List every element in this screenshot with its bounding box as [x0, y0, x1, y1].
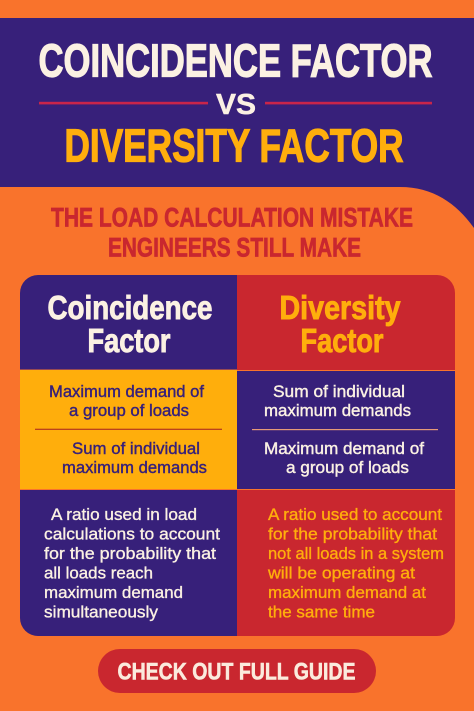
subtitle: ENGINEERS STILL MAKE	[108, 232, 361, 262]
panel: diversity definition: not all loads in a system	[268, 544, 444, 563]
vs divider: VS	[216, 89, 256, 121]
panel: diversity formula: maximum demands	[264, 402, 411, 420]
panel: diversity definition: will be operating at	[267, 564, 415, 582]
panel: coincidence formula: a group of loads	[69, 402, 189, 420]
panel: diversity formula	[237, 371, 455, 489]
panel: coincidence factor header: Coincidence	[48, 289, 212, 326]
panel: diversity factor header: Factor	[300, 322, 384, 359]
panel: coincidence formula: maximum demands	[62, 459, 207, 477]
panel: coincidence formula: Sum of individual	[72, 440, 200, 458]
title banner	[0, 18, 474, 228]
button: check out full guide: CHECK OUT FULL GUIDE	[118, 658, 356, 686]
subtitle	[51, 202, 413, 262]
panel: coincidence definition: for the probability that	[44, 544, 216, 563]
panel: diversity definition: for the probability that	[268, 524, 437, 544]
panel: coincidence formula	[20, 370, 237, 489]
panel: diversity formula: Maximum demand of	[264, 440, 424, 458]
panel: diversity factor header	[237, 275, 455, 370]
panel: diversity definition: A ratio used to account	[268, 505, 442, 524]
panel: diversity definition: maximum demand at	[268, 583, 426, 602]
panel: diversity formula: a group of loads	[286, 459, 409, 477]
panel: coincidence definition: A ratio used in load	[51, 505, 197, 524]
panel: coincidence factor header: Factor	[88, 322, 171, 359]
panel: coincidence factor header	[20, 275, 237, 370]
panel: diversity formula: Sum of individual	[273, 383, 405, 401]
panel: coincidence definition: maximum demand	[44, 583, 183, 602]
comparison table	[20, 275, 455, 636]
button: check out full guide	[98, 649, 376, 693]
panel: diversity factor header: Diversity	[280, 289, 401, 326]
panel: coincidence definition: simultaneously	[44, 602, 158, 622]
panel: diversity definition: the same time	[268, 602, 375, 622]
panel: coincidence definition	[20, 490, 237, 636]
panel: diversity definition	[237, 490, 455, 636]
panel: coincidence definition: all loads reach	[44, 564, 153, 582]
panel: coincidence formula: Maximum demand of	[49, 383, 204, 401]
panel: coincidence definition: calculations to account	[44, 524, 220, 544]
